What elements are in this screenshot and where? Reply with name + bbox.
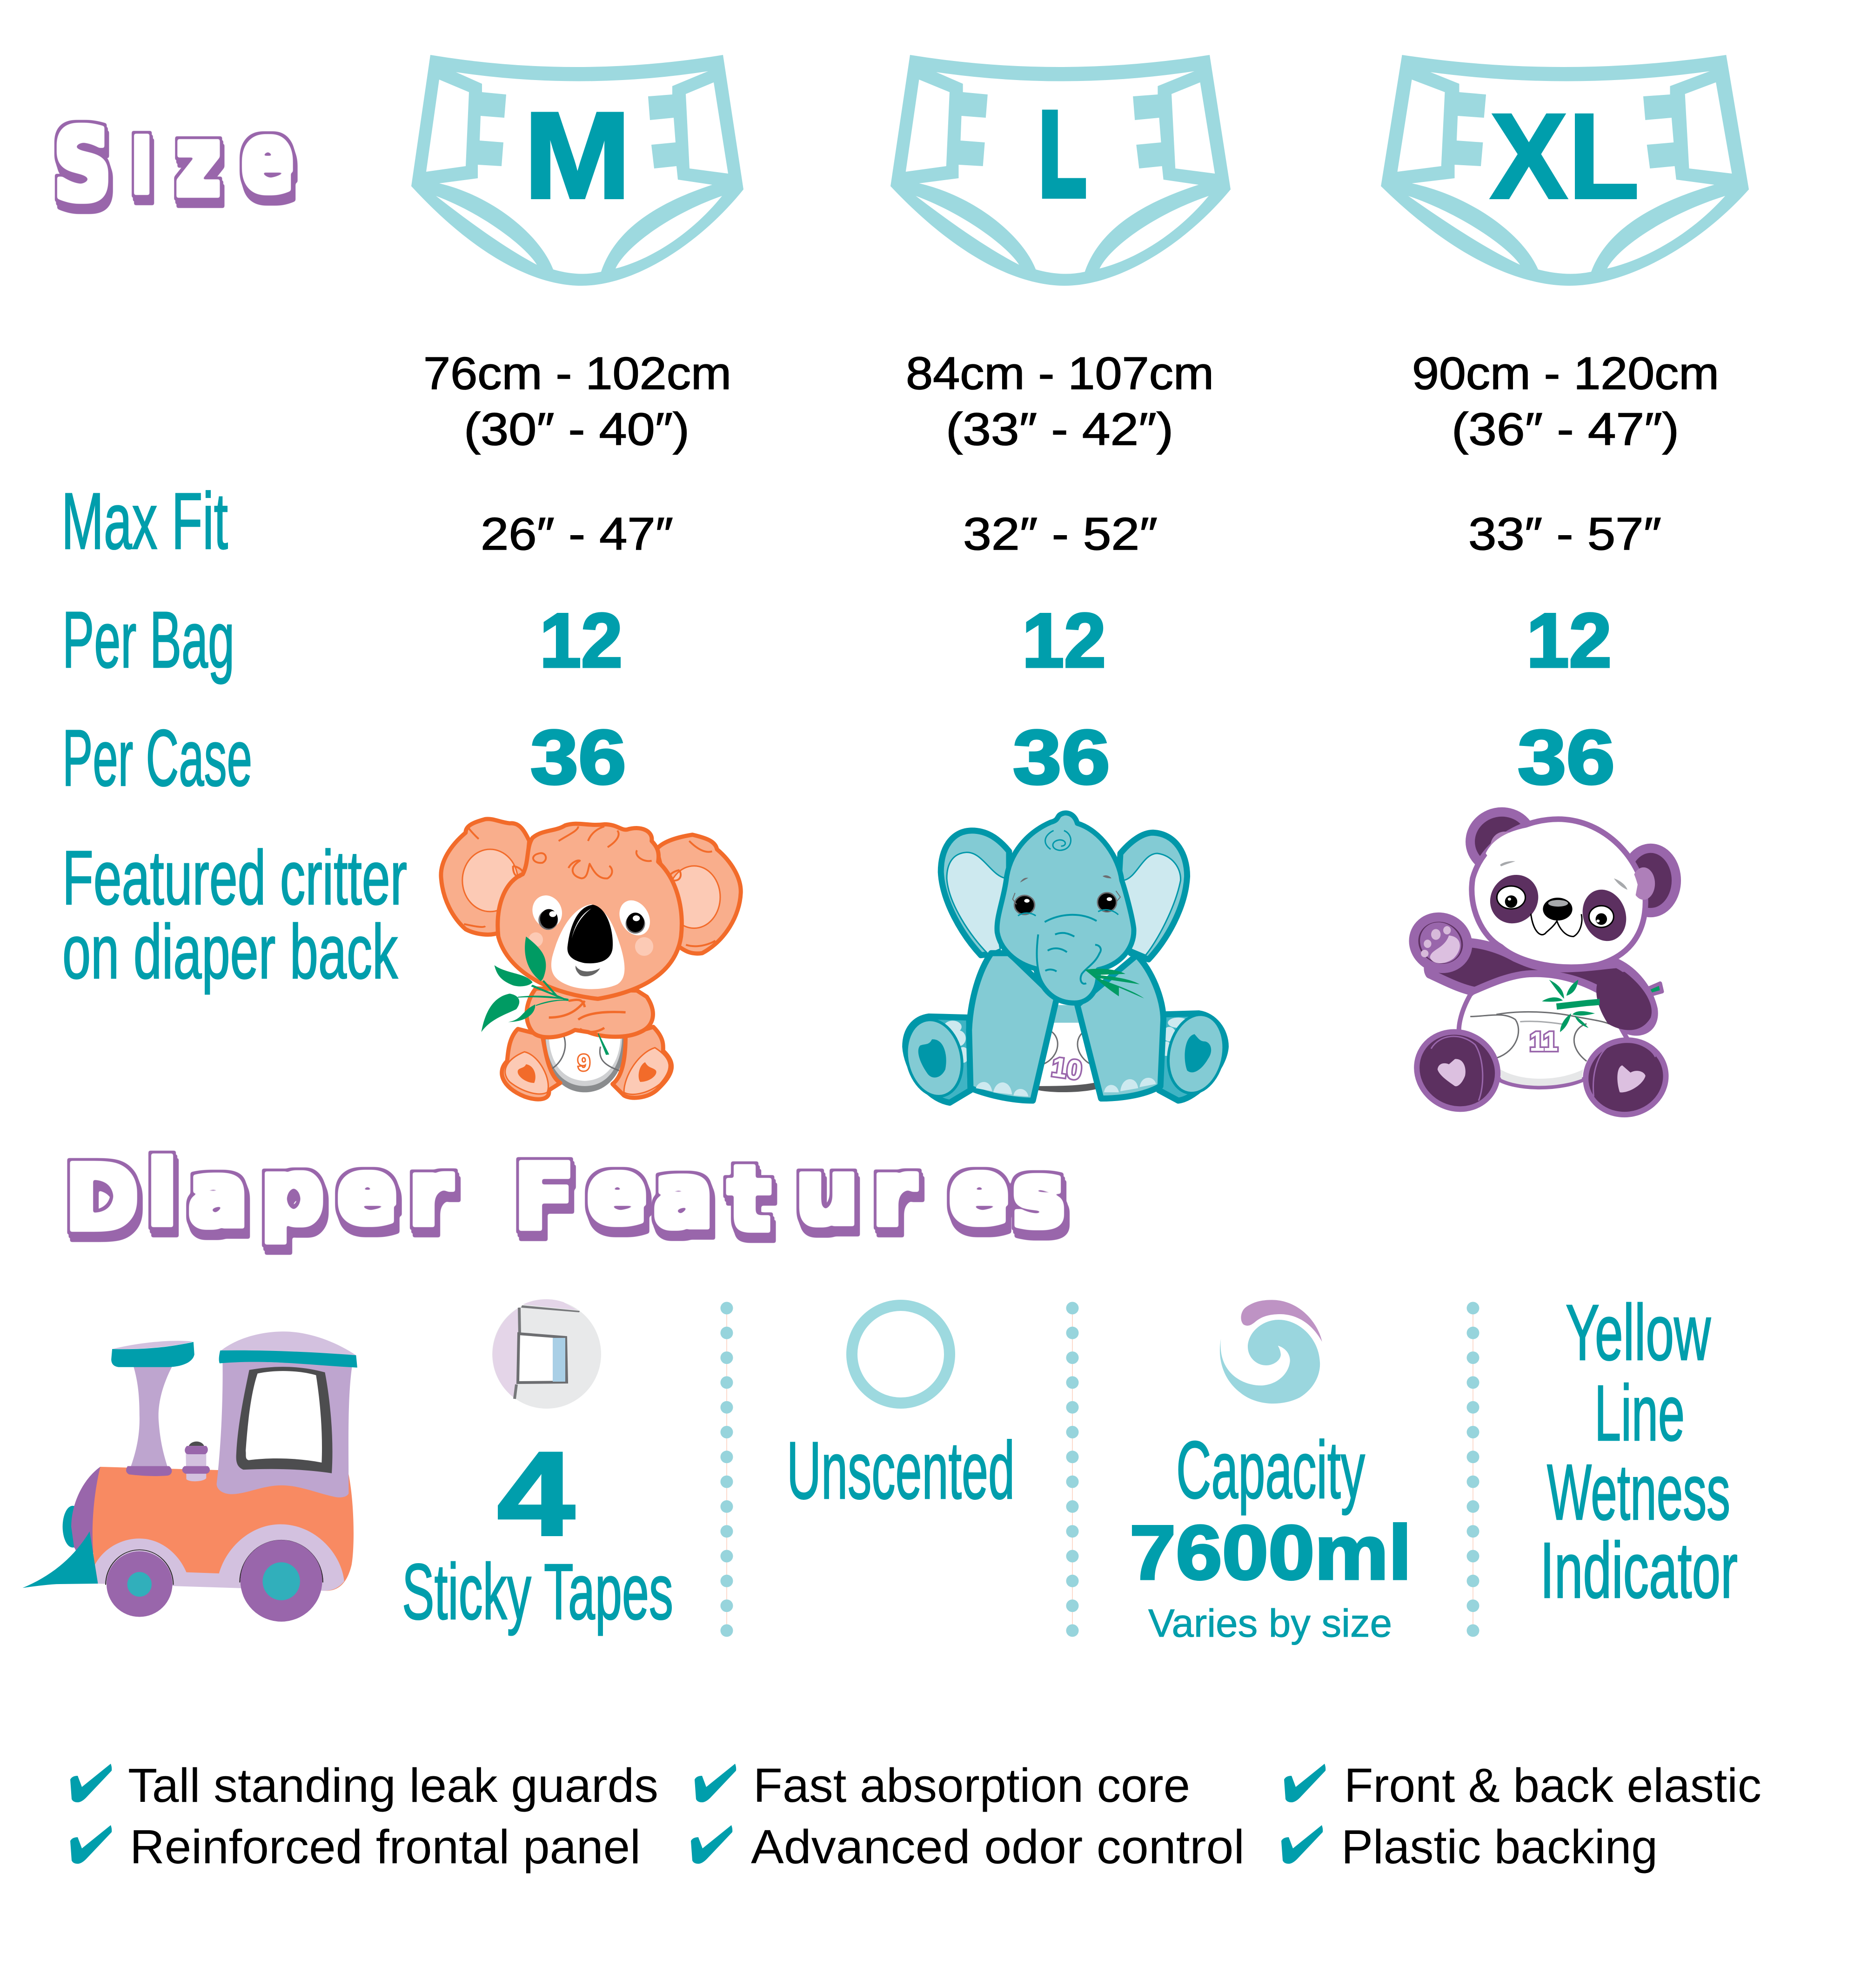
checklist column 3	[1281, 1759, 1761, 1874]
heading: Size: e	[241, 103, 294, 214]
waist range L: 84cm - 107cm	[906, 348, 1214, 399]
heading: Diaper Features: Diaper Features	[65, 1141, 1065, 1250]
feature: capacity	[1130, 1300, 1412, 1645]
max fit L: 32″ - 52″	[963, 508, 1158, 559]
per bag XL: 12	[1526, 598, 1612, 683]
row label: Per Case: Per Case	[62, 713, 252, 803]
checklist column 1: Tall standing leak guards	[128, 1759, 658, 1812]
icon: ring	[852, 1305, 950, 1403]
dotted divider 1	[726, 1308, 727, 1631]
dotted divider 2	[1072, 1308, 1073, 1631]
checklist column 2: Advanced odor control	[751, 1820, 1245, 1874]
icon: diaper size L: L	[1039, 88, 1086, 221]
waist range L	[906, 348, 1214, 455]
heading: Size: S	[54, 107, 112, 222]
per case XL: 36	[1518, 714, 1615, 800]
critter: elephant	[901, 813, 1229, 1103]
waist range L: (33″ - 42″)	[946, 403, 1173, 455]
heading: Size: i	[132, 125, 152, 209]
max fit M: 26″ - 47″	[481, 508, 673, 559]
feature: yellow line wetness indicator: Line	[1594, 1369, 1685, 1457]
icon: diaper size XL: XL	[1490, 88, 1640, 224]
illustration: train	[22, 1331, 357, 1622]
checklist column 3: Front & back elastic	[1344, 1759, 1761, 1812]
feature: yellow line wetness indicator: Yellow	[1566, 1289, 1711, 1377]
row label: Featured critter: Featured critter	[62, 835, 407, 920]
waist range M	[423, 348, 731, 455]
heading: Size: z	[175, 107, 221, 217]
critter: elephant: 10	[1050, 1052, 1084, 1086]
per case M: 36	[530, 714, 626, 800]
icon: swirl	[1220, 1300, 1322, 1404]
feature: yellow line wetness indicator: Indicator	[1540, 1526, 1738, 1615]
waist range XL	[1412, 348, 1719, 455]
critter: panda: 11	[1529, 1027, 1558, 1057]
checklist column 1	[70, 1759, 658, 1874]
per case L: 36	[1013, 714, 1110, 800]
row label: Featured critter: on diaper back	[62, 909, 398, 994]
critter: panda	[1405, 808, 1676, 1122]
row label: Per Bag: Per Bag	[62, 595, 234, 685]
critter: koala: 9	[578, 1051, 590, 1075]
checklist column 3: Plastic backing	[1341, 1820, 1658, 1874]
label: sticky tapes: Sticky Tapes	[402, 1548, 673, 1636]
waist range M: 76cm - 102cm	[423, 348, 731, 399]
icon: sticky tape	[492, 1299, 601, 1409]
row label: Featured critter	[62, 835, 407, 994]
waist range XL: 90cm - 120cm	[1412, 348, 1719, 399]
number: 4 tapes: 4	[497, 1428, 575, 1560]
checklist column 1: Reinforced frontal panel	[130, 1820, 641, 1874]
feature: yellow line wetness indicator: Wetness	[1547, 1448, 1730, 1537]
per bag M: 12	[540, 598, 623, 683]
checklist column 2: Fast absorption core	[753, 1759, 1190, 1812]
label: capacity: Capacity	[1176, 1425, 1365, 1516]
per bag L: 12	[1022, 598, 1106, 683]
checklist column 2	[691, 1759, 1245, 1874]
note: varies by size: Varies by size	[1148, 1601, 1392, 1645]
waist range XL: (36″ - 47″)	[1452, 403, 1679, 455]
critter: koala	[441, 819, 741, 1099]
icon: diaper size XL	[1381, 55, 1749, 286]
feature: yellow line wetness indicator	[1540, 1289, 1738, 1615]
waist range M: (30″ - 40″)	[464, 403, 690, 455]
number: 7600ml: 7600ml	[1130, 1510, 1412, 1595]
feature: sticky tapes	[402, 1299, 673, 1636]
label: unscented: Unscented	[787, 1425, 1015, 1516]
icon: diaper size L	[890, 55, 1231, 286]
icon: diaper size M	[411, 55, 743, 286]
icon: diaper size M: M	[524, 87, 631, 224]
row label: Max Fit: Max Fit	[61, 477, 228, 566]
feature: unscented	[787, 1305, 1015, 1516]
max fit XL: 33″ - 57″	[1468, 508, 1661, 559]
